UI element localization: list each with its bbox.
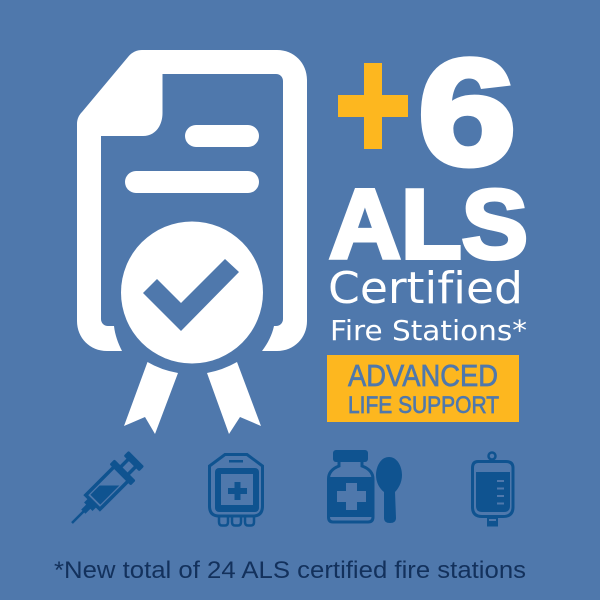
icon: medicine bottle and spoon [328, 450, 402, 523]
badge line 2: LIFE SUPPORT [348, 392, 499, 419]
Fire Stations text: Fire Stations* [330, 315, 527, 347]
icon: IV drip bag [472, 452, 513, 526]
badge background [327, 355, 519, 422]
left ribbon [124, 362, 178, 434]
footnote: *New total of 24 ALS certified fire stations [54, 557, 526, 584]
Certified text: Certified [328, 263, 523, 314]
big number 6: 6 [418, 28, 516, 196]
icon: syringe [61, 448, 147, 534]
seal circle [121, 222, 263, 364]
text line short [185, 125, 259, 147]
ALS heading: ALS [329, 169, 528, 279]
icon: blood bag [210, 454, 262, 526]
plus sign [338, 63, 408, 149]
check mark [143, 259, 239, 331]
badge line 1: ADVANCED [348, 358, 498, 393]
text line long [125, 171, 259, 193]
icon: certificate document with ribbon [77, 50, 307, 434]
document outline [77, 50, 307, 351]
badge: advanced life support [327, 355, 519, 422]
right ribbon [207, 362, 261, 434]
